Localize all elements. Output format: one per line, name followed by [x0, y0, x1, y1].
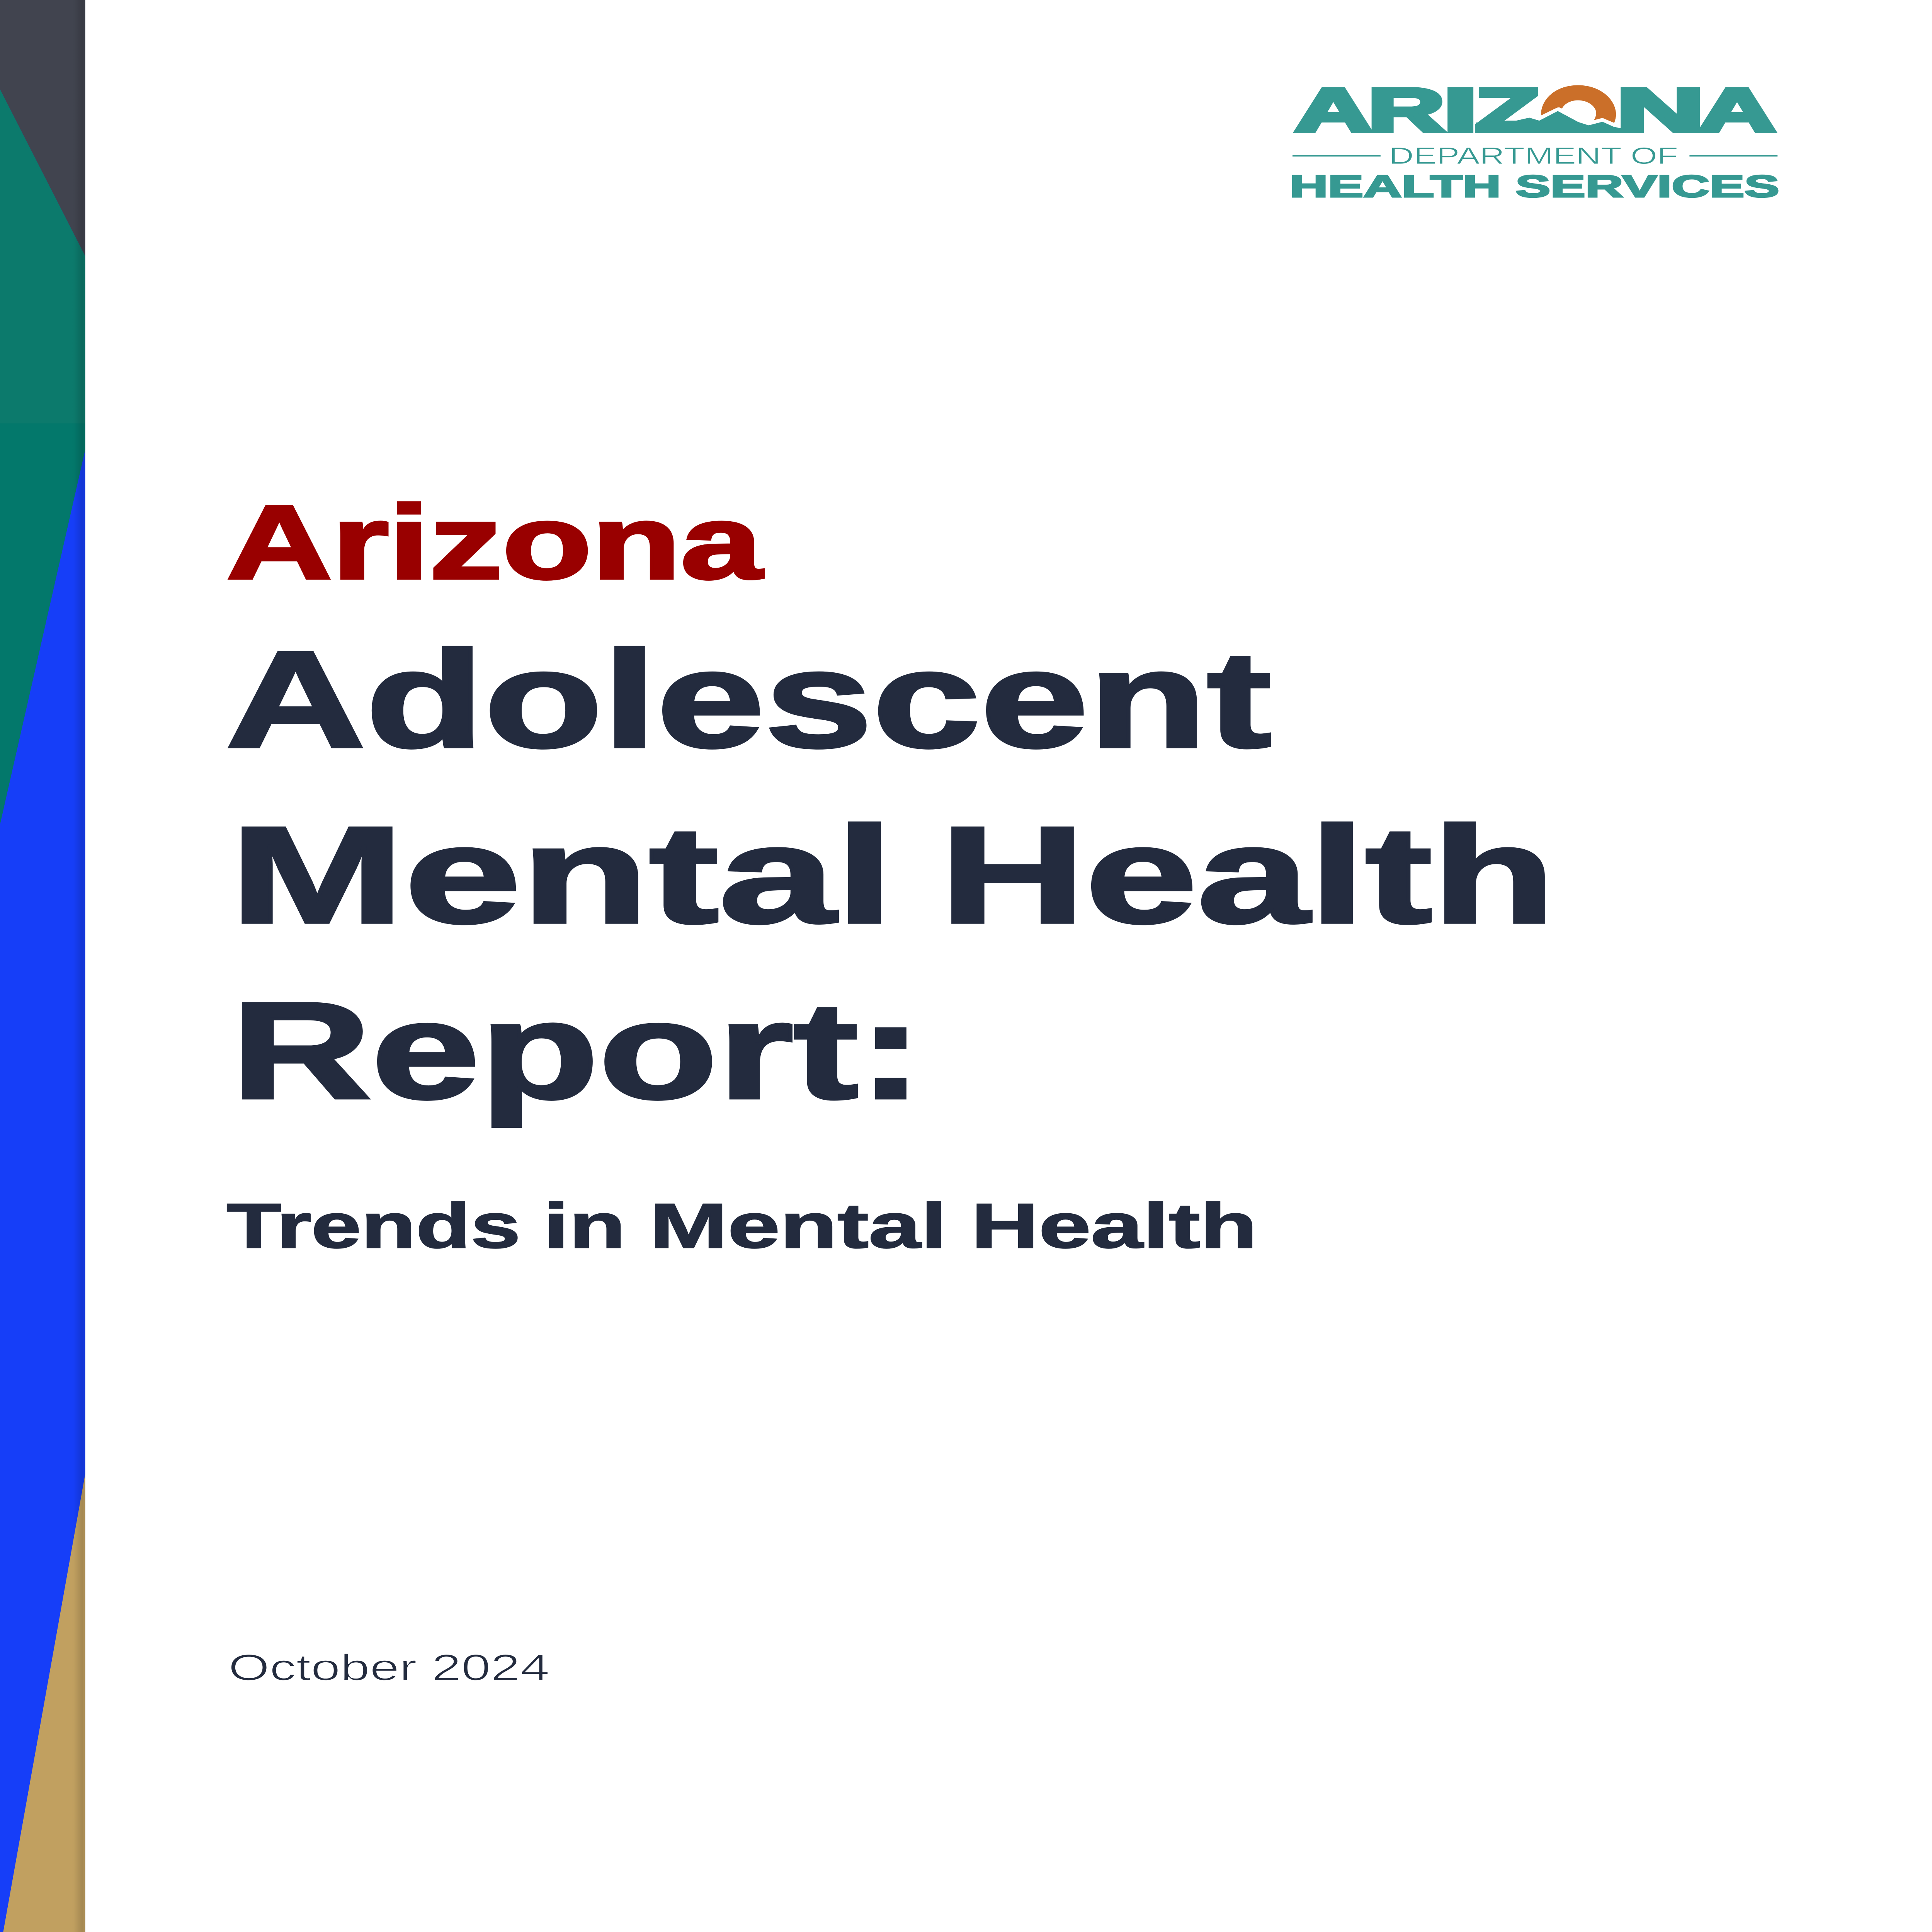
panel: left colour sidebar: [0, 0, 85, 1932]
subtitle: Trends in Mental Health: Trends: [226, 1190, 520, 1261]
subtitle: Trends in Mental Health: [226, 1190, 1257, 1261]
subtitle: Trends in Mental Health: in: [543, 1190, 626, 1261]
heading: Arizona: Arizona: [226, 484, 763, 600]
title: Adolescent: Adolescent: [226, 622, 1272, 776]
logo wordmark: ARIZONA: R: [1368, 76, 1445, 145]
title: Report:: Report:: [231, 974, 923, 1128]
logo wordmark: ARIZONA: [1294, 76, 1776, 145]
logo wordmark: ARIZONA: N: [1616, 76, 1704, 145]
logo text: DEPARTMENT OF: DEPARTMENT OF: [1389, 143, 1678, 169]
icon: sun arch forming the letter O: [1541, 85, 1616, 123]
logo text: HEALTH SERVICES: SERVICES: [1515, 169, 1779, 204]
date: October 2024: October 2024: [228, 1647, 550, 1688]
title: Mental Health: [230, 798, 1555, 952]
logo wordmark: ARIZONA: A: [1698, 76, 1776, 145]
title: Mental Health: Health: [940, 798, 1555, 952]
logo rule: left: [1293, 155, 1381, 156]
title: Mental Health: Mental: [230, 798, 894, 952]
logo wordmark: ARIZONA: A: [1294, 76, 1372, 145]
logo: Arizona Department of Health Services: [1290, 76, 1779, 204]
subtitle: Trends in Mental Health: Mental: [650, 1190, 947, 1261]
logo text: HEALTH SERVICES: HEALTH: [1290, 169, 1501, 204]
logo text: HEALTH SERVICES: [1290, 169, 1779, 204]
logo wordmark: ARIZONA: I: [1443, 76, 1478, 145]
logo wordmark: ARIZONA: Z: [1475, 76, 1540, 145]
logo rule: right: [1689, 155, 1777, 156]
subtitle: Trends in Mental Health: Health: [971, 1190, 1257, 1261]
icon: mountains: [1476, 111, 1623, 133]
